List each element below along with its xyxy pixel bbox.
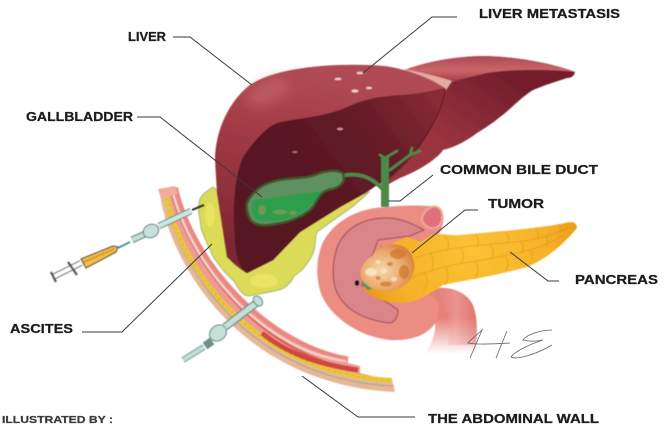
wall muscle base <box>165 187 392 381</box>
pancreas <box>363 222 577 303</box>
label: the abdominal wall: THE ABDOMINAL WALL <box>428 412 599 426</box>
duodenum interior <box>333 218 424 323</box>
duodenum C shape <box>317 205 444 340</box>
leader lines <box>82 17 559 417</box>
signature <box>468 329 552 358</box>
bile ducts <box>340 148 420 207</box>
syringe plunger <box>53 263 81 277</box>
duodenum lower tube <box>405 288 477 354</box>
label: common bile duct: COMMON BILE DUCT <box>440 163 598 177</box>
label: tumor: TUMOR <box>488 197 544 211</box>
label: liver: LIVER <box>128 30 166 44</box>
gallbladder and bile ducts <box>247 148 420 225</box>
label: illustrated by: ILLUSTRATED BY : <box>2 414 113 426</box>
pancreas lobules <box>410 224 570 292</box>
drainage tube <box>183 294 265 360</box>
wall outer skin <box>160 193 395 392</box>
wall fat layer <box>164 193 394 386</box>
duodenum <box>317 205 477 354</box>
label: liver metastasis: LIVER METASTASIS <box>479 7 620 21</box>
tumor dark dot <box>355 280 359 286</box>
liver <box>215 56 575 273</box>
ascites fluid <box>198 187 369 296</box>
tumor <box>355 244 414 291</box>
liver left lobe <box>215 65 445 273</box>
label: gallbladder: GALLBLADDER <box>26 110 133 124</box>
wall red muscle <box>171 190 358 370</box>
label: pancreas: PANCREAS <box>575 273 658 287</box>
syringe barrel <box>81 246 118 268</box>
syringe <box>51 205 204 282</box>
label: ascites: ASCITES <box>10 322 73 336</box>
duodenum flange <box>422 207 442 228</box>
gallbladder <box>247 171 344 225</box>
liver right lobe <box>385 56 575 186</box>
liver underside <box>234 88 445 273</box>
catheter connector <box>132 234 145 240</box>
abdominal wall <box>158 186 395 392</box>
liver metastasis spots <box>292 72 372 153</box>
liver highlight <box>242 73 294 111</box>
wall pale layer <box>172 190 346 361</box>
